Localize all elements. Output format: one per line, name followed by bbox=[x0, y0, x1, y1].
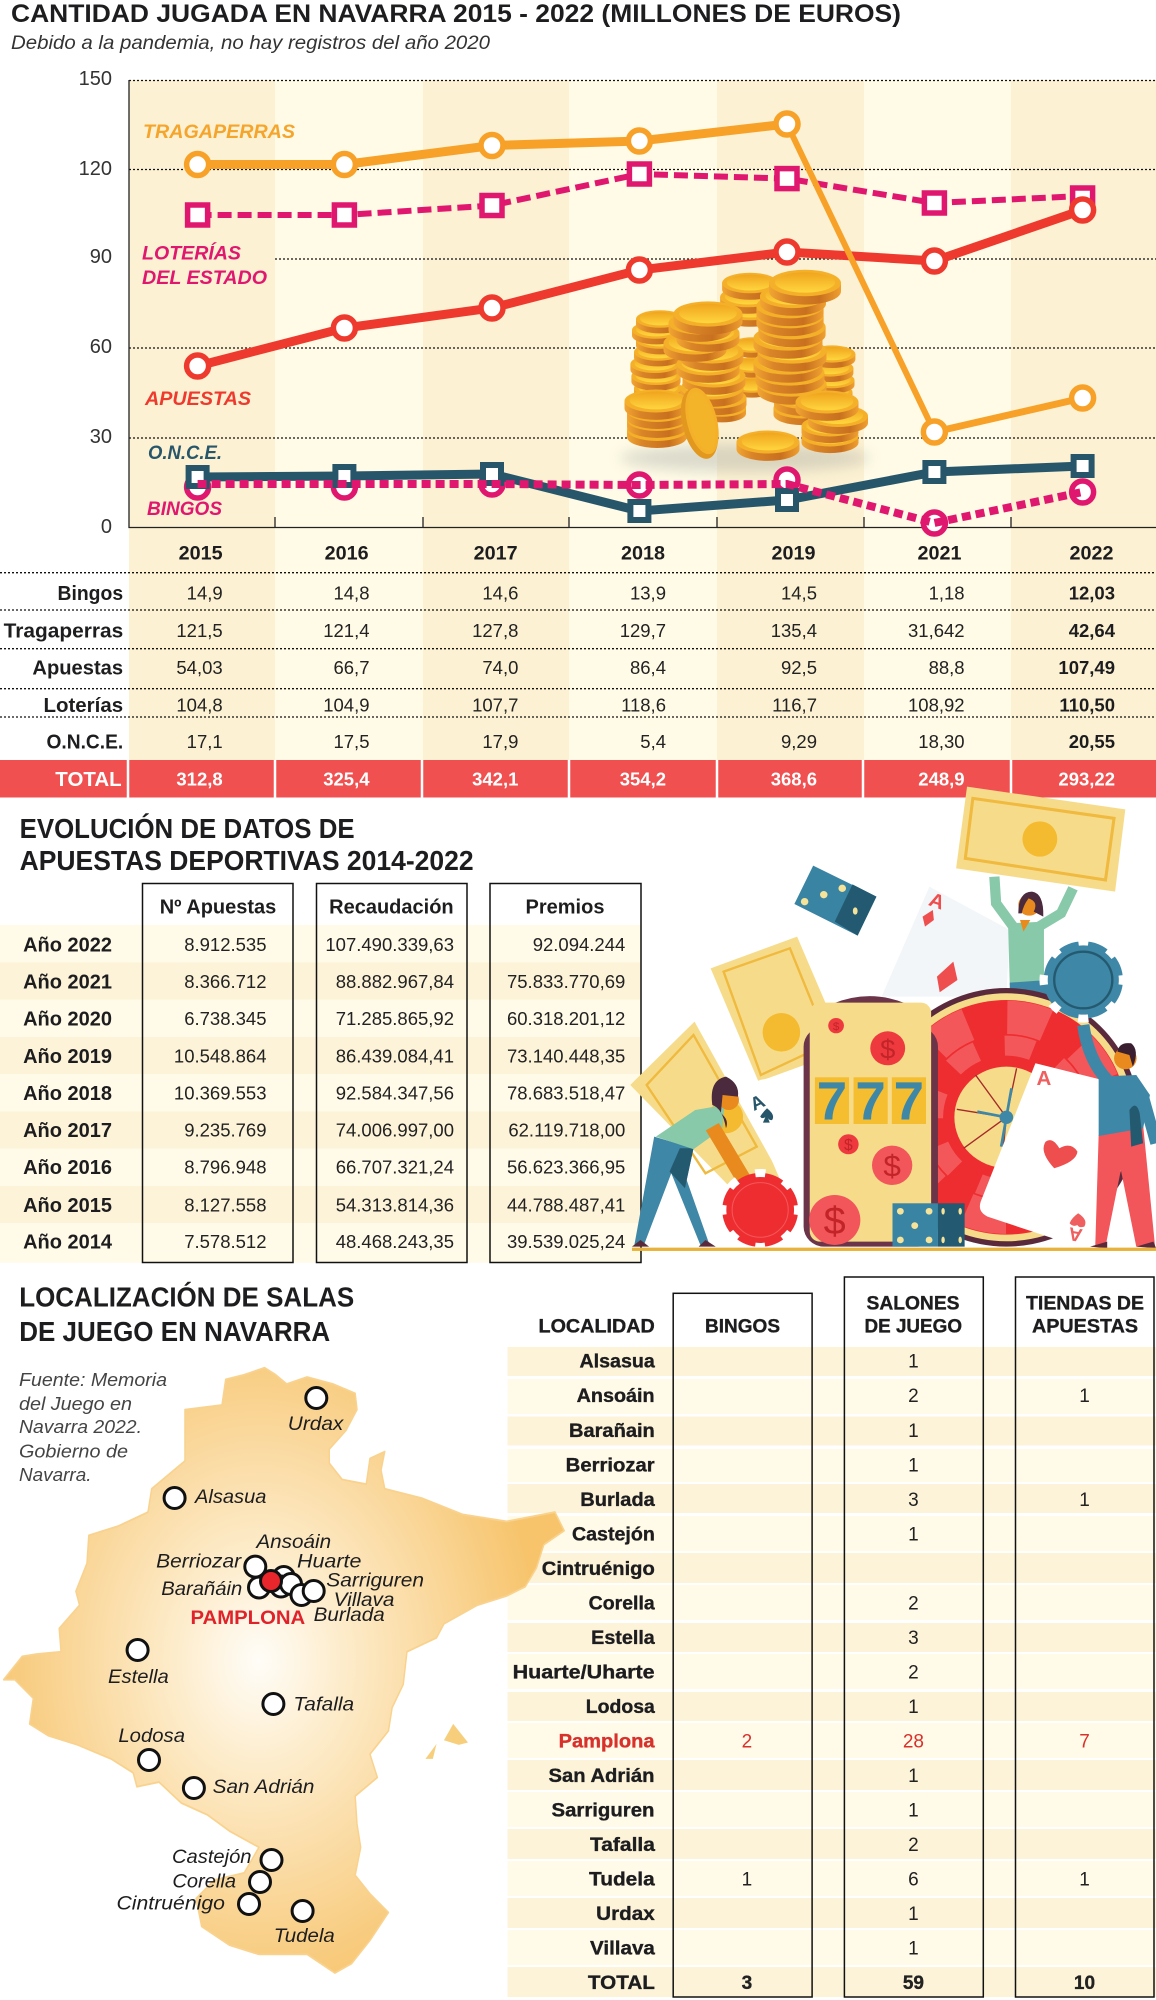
row: ansoáin: Ansoáin bbox=[577, 1386, 655, 1407]
row: total: 354,2 bbox=[620, 768, 666, 790]
row: bingos: Bingos bbox=[58, 583, 123, 605]
row: año 2020: Año 2020 bbox=[23, 1008, 112, 1030]
row: bingos: 14,6 bbox=[482, 582, 518, 604]
row: total: 325,4 bbox=[323, 768, 370, 790]
series: apuestas bbox=[187, 199, 1094, 377]
row: loterías: 118,6 bbox=[621, 694, 666, 716]
row: total: 312,8 bbox=[176, 768, 223, 790]
row: total: 248,9 bbox=[918, 768, 965, 790]
row: total: 342,1 bbox=[472, 768, 518, 790]
location labels: Berriozar bbox=[156, 1552, 242, 1572]
row: año 2019: 73.140.448,35 bbox=[507, 1046, 625, 1066]
table headers: LOCALIDAD bbox=[538, 1316, 655, 1338]
row: apuestas: 54,03 bbox=[176, 657, 223, 678]
row: año 2017: 62.119.718,00 bbox=[508, 1120, 625, 1140]
illustration: casino scene bbox=[630, 787, 1156, 1251]
row: bingos: 14,9 bbox=[187, 582, 223, 604]
row: loterías: Loterías bbox=[44, 695, 123, 717]
label: apuestas: APUESTAS bbox=[144, 389, 251, 410]
row: burlada: 3 bbox=[908, 1490, 919, 1511]
row: urdax bbox=[596, 1904, 919, 1925]
row: o.n.c.e.: 17,9 bbox=[482, 731, 518, 752]
heading: evolución de datos: APUESTAS DEPORTIVAS 2014-2022 bbox=[20, 845, 474, 876]
row: urdax: 1 bbox=[908, 1904, 919, 1925]
row: apuestas: 107,49 bbox=[1058, 657, 1115, 678]
figure: woman holding banknote bbox=[994, 877, 1073, 1000]
row: año 2017: 74.006.997,00 bbox=[336, 1120, 454, 1140]
row: castejón bbox=[572, 1524, 919, 1546]
row: barañain bbox=[569, 1421, 919, 1442]
location labels: Castejón bbox=[172, 1847, 252, 1868]
casino chip: red bbox=[722, 1173, 798, 1247]
location labels: Burlada bbox=[314, 1605, 385, 1626]
row: loterías: 108,92 bbox=[908, 694, 965, 716]
row: total bbox=[588, 1973, 1095, 1994]
row: año 2021: 88.882.967,84 bbox=[336, 971, 454, 992]
source note: Navarra 2022. bbox=[19, 1417, 142, 1437]
slot machine: 7 bbox=[817, 1072, 847, 1131]
row: lodosa bbox=[586, 1697, 919, 1718]
row: villava: 1 bbox=[908, 1938, 919, 1960]
data table: cantidad jugada bbox=[0, 544, 1156, 798]
year headers: 2021 bbox=[918, 544, 962, 564]
location labels: Villava bbox=[334, 1590, 394, 1611]
table headers: BINGOS bbox=[705, 1316, 780, 1338]
column headers: Nº Apuestas bbox=[160, 896, 276, 918]
row: apuestas: 66,7 bbox=[333, 657, 370, 678]
row: apuestas: 74,0 bbox=[482, 657, 518, 678]
row: apuestas: 86,4 bbox=[630, 657, 666, 678]
row: año 2022: 92.094.244 bbox=[533, 934, 625, 955]
playing card: ace of diamonds bbox=[882, 887, 1010, 997]
row: año 2020: 71.285.865,92 bbox=[336, 1008, 454, 1029]
row: bingos: 14,5 bbox=[781, 582, 817, 604]
row: año 2018: 10.369.553 bbox=[174, 1082, 266, 1104]
row: berriozar bbox=[566, 1456, 919, 1476]
row: año 2022: Año 2022 bbox=[23, 934, 112, 956]
slot machine: 7 bbox=[894, 1072, 924, 1131]
series: o.n.c.e. bbox=[189, 457, 1092, 520]
series: tragaperras bbox=[187, 113, 1094, 443]
row: loterías: 104,8 bbox=[176, 694, 223, 716]
row: tragaperras: 135,4 bbox=[771, 620, 817, 641]
row: pamplona: 7 bbox=[1079, 1732, 1090, 1752]
playing card: ace of hearts: A bbox=[1037, 1068, 1052, 1090]
location labels: Sarriguren bbox=[326, 1570, 424, 1592]
row: huarte/uharte: 2 bbox=[908, 1662, 919, 1684]
location labels: Corella bbox=[172, 1872, 236, 1892]
row: año 2015: Año 2015 bbox=[23, 1195, 112, 1217]
location labels: Urdax bbox=[288, 1414, 345, 1435]
row: tafalla: Tafalla bbox=[590, 1835, 655, 1856]
row: apuestas bbox=[32, 657, 1115, 680]
row: alsasua bbox=[580, 1352, 919, 1372]
row: año 2020 bbox=[23, 1008, 625, 1030]
y axis labels: 60 bbox=[90, 336, 112, 358]
row: loterías: 110,50 bbox=[1059, 694, 1115, 716]
year headers: 2015 bbox=[179, 544, 223, 564]
row: estella: Estella bbox=[591, 1628, 655, 1649]
row: o.n.c.e.: 9,29 bbox=[781, 731, 817, 752]
row: año 2017 bbox=[23, 1120, 625, 1142]
row: año 2019: 10.548.864 bbox=[174, 1046, 266, 1066]
row: año 2021: Año 2021 bbox=[23, 972, 112, 994]
location labels: Tafalla bbox=[293, 1694, 354, 1716]
heading: evolución de datos: EVOLUCIÓN DE DATOS DE bbox=[20, 813, 355, 844]
location labels: Alsasua bbox=[194, 1487, 266, 1508]
location labels bbox=[108, 1414, 424, 1947]
column headers: Recaudación bbox=[329, 896, 454, 918]
row: sarriguren bbox=[552, 1800, 919, 1822]
row: huarte/uharte bbox=[513, 1662, 919, 1684]
row: corella bbox=[589, 1594, 919, 1614]
row: año 2021: 75.833.770,69 bbox=[507, 971, 625, 992]
row: apuestas: 92,5 bbox=[781, 657, 817, 678]
row: o.n.c.e.: 20,55 bbox=[1069, 731, 1115, 752]
row: total: TOTAL bbox=[588, 1973, 655, 1994]
row: año 2018: 78.683.518,47 bbox=[507, 1082, 625, 1104]
slot coins: $ bbox=[844, 1137, 853, 1154]
slot coins: $ bbox=[833, 1021, 840, 1033]
figure: man bbox=[1083, 1025, 1156, 1248]
label: loterías del estado: LOTERÍAS bbox=[142, 242, 241, 264]
column headers bbox=[160, 896, 604, 918]
row: año 2014: 48.468.243,35 bbox=[336, 1231, 454, 1252]
row: castejón: Castejón bbox=[572, 1524, 655, 1546]
row: pamplona: Pamplona bbox=[559, 1732, 655, 1752]
row: tudela bbox=[589, 1870, 1090, 1890]
row: año 2014: 7.578.512 bbox=[184, 1231, 266, 1252]
row: o.n.c.e.: 17,5 bbox=[333, 731, 370, 752]
row: tragaperras: 31,642 bbox=[908, 620, 965, 641]
row: corella: Corella bbox=[589, 1594, 655, 1614]
row: berriozar: Berriozar bbox=[566, 1456, 655, 1476]
row: total: 10 bbox=[1074, 1973, 1095, 1994]
row: tragaperras: 129,7 bbox=[620, 620, 666, 641]
source note: Fuente: Memoria bbox=[19, 1370, 167, 1390]
row: loterías: 104,9 bbox=[323, 694, 370, 716]
row: san adrián: San Adrián bbox=[548, 1766, 654, 1787]
row: año 2015: 54.313.814,36 bbox=[336, 1194, 454, 1216]
row: año 2015: 8.127.558 bbox=[184, 1194, 266, 1216]
row: pamplona bbox=[559, 1732, 1090, 1752]
row: huarte/uharte: Huarte/Uharte bbox=[513, 1662, 655, 1684]
line chart bbox=[79, 68, 1156, 538]
row: tudela: 6 bbox=[908, 1870, 919, 1890]
y axis labels: 90 bbox=[90, 246, 112, 268]
row: berriozar: 1 bbox=[908, 1456, 919, 1476]
series: bingos dashed line bbox=[198, 484, 1083, 523]
row: año 2016 bbox=[23, 1156, 625, 1179]
row: urdax: Urdax bbox=[596, 1904, 655, 1925]
row: año 2014 bbox=[23, 1231, 625, 1254]
y axis labels: 150 bbox=[79, 68, 112, 90]
location labels: Barañáin bbox=[161, 1579, 242, 1600]
casino chip: blue bbox=[1044, 941, 1123, 1019]
row: año 2016: Año 2016 bbox=[23, 1157, 112, 1179]
row: burlada: Burlada bbox=[580, 1490, 655, 1511]
row: ansoáin: 1 bbox=[1079, 1386, 1090, 1407]
row: alsasua: 1 bbox=[908, 1352, 919, 1372]
row: total: 368,6 bbox=[771, 768, 817, 790]
banknote: left lower bbox=[630, 1022, 781, 1190]
row: estella bbox=[591, 1628, 919, 1649]
playing card: ace of hearts bbox=[980, 1063, 1109, 1247]
roulette wheel bbox=[874, 988, 1139, 1247]
die: bottom bbox=[892, 1203, 965, 1247]
map shape bbox=[4, 1368, 564, 1973]
row: año 2022 bbox=[23, 934, 625, 956]
table: salas por localidad bbox=[513, 1277, 1154, 1997]
slot coins: $ bbox=[880, 1035, 895, 1064]
table headers: SALONES bbox=[866, 1294, 960, 1314]
row: total: 3 bbox=[742, 1973, 752, 1994]
row: total bbox=[0, 760, 1156, 798]
row: tragaperras: Tragaperras bbox=[4, 620, 123, 642]
row: apuestas: Apuestas bbox=[32, 658, 123, 680]
ground line bbox=[632, 1248, 1156, 1251]
row: burlada bbox=[580, 1490, 1090, 1511]
row: loterías bbox=[44, 694, 1115, 717]
row: año 2014: Año 2014 bbox=[23, 1232, 113, 1254]
y axis labels: 30 bbox=[90, 426, 112, 448]
row: año 2016: 8.796.948 bbox=[184, 1156, 266, 1178]
row: año 2018: Año 2018 bbox=[23, 1083, 112, 1105]
heading: evolución de datos bbox=[20, 813, 474, 876]
column headers: Premios bbox=[526, 896, 604, 918]
row: o.n.c.e.: 17,1 bbox=[187, 731, 223, 752]
row: o.n.c.e. bbox=[46, 731, 1115, 754]
row: san adrián: 1 bbox=[908, 1766, 919, 1787]
row: ansoáin: 2 bbox=[908, 1386, 919, 1407]
series: loterías del estado bbox=[188, 164, 1093, 225]
year headers: 2019 bbox=[772, 544, 816, 564]
row: burlada: 1 bbox=[1079, 1490, 1090, 1511]
playing card: ace of hearts: A bbox=[1066, 1222, 1084, 1245]
row: tragaperras: 121,4 bbox=[323, 620, 370, 641]
row: pamplona: 2 bbox=[742, 1732, 752, 1752]
row: tafalla bbox=[590, 1835, 919, 1856]
playing card: ace of spades bbox=[741, 1070, 811, 1247]
row: año 2014: 39.539.025,24 bbox=[507, 1231, 625, 1252]
row: bingos: 12,03 bbox=[1069, 582, 1115, 604]
playing card: ace of diamonds: A bbox=[926, 889, 948, 915]
map: navarra bbox=[4, 1368, 564, 1973]
title: CANTIDAD JUGADA EN NAVARRA 2015 - 2022 (MILLONES DE EUROS) bbox=[11, 0, 901, 28]
banknote: top bbox=[956, 787, 1125, 892]
row: año 2015 bbox=[23, 1194, 625, 1217]
label: loterías del estado: DEL ESTADO bbox=[142, 268, 267, 289]
y axis labels: 120 bbox=[79, 158, 112, 180]
heading: localización de salas: LOCALIZACIÓN DE SALAS bbox=[19, 1281, 354, 1312]
row: alsasua: Alsasua bbox=[580, 1352, 655, 1372]
label: loterías del estado bbox=[142, 242, 267, 289]
row: total: 293,22 bbox=[1058, 768, 1115, 790]
location labels: Tudela bbox=[274, 1926, 335, 1947]
panel: column bands bbox=[129, 80, 1156, 760]
row: año 2017: Año 2017 bbox=[23, 1120, 112, 1142]
row: san adrián bbox=[548, 1766, 919, 1787]
row: barañain: 1 bbox=[908, 1421, 919, 1442]
row: o.n.c.e.: 5,4 bbox=[640, 731, 666, 752]
row: total: 59 bbox=[903, 1973, 924, 1994]
location labels: Cintruénigo bbox=[116, 1894, 225, 1914]
row: sarriguren: Sarriguren bbox=[552, 1800, 654, 1822]
location labels: Lodosa bbox=[118, 1726, 185, 1747]
row: bingos: 14,8 bbox=[333, 582, 370, 604]
location labels: Huarte bbox=[297, 1552, 361, 1572]
die: floating bbox=[794, 866, 876, 936]
row: loterías: 116,7 bbox=[772, 694, 817, 716]
row: villava: Villava bbox=[590, 1938, 655, 1960]
table: localidades stripes bbox=[508, 1347, 1156, 1997]
banknote: left middle bbox=[711, 937, 846, 1082]
row: bingos: 1,18 bbox=[929, 582, 965, 604]
coins illustration bbox=[620, 270, 870, 472]
table headers: TIENDAS DE bbox=[1026, 1294, 1144, 1314]
slot coins: $ bbox=[824, 1200, 846, 1243]
year headers: 2022 bbox=[1070, 544, 1114, 564]
slot coins: $ bbox=[883, 1149, 901, 1184]
row: tragaperras: 42,64 bbox=[1069, 620, 1116, 641]
row: o.n.c.e.: O.N.C.E. bbox=[46, 732, 123, 754]
playing card: ace of spades: A bbox=[747, 1091, 769, 1116]
slot machine: 7 bbox=[855, 1072, 886, 1131]
year headers: 2016 bbox=[325, 544, 369, 564]
row: villava bbox=[590, 1938, 919, 1960]
row: tafalla: 2 bbox=[908, 1835, 919, 1856]
row: año 2022: 107.490.339,63 bbox=[325, 934, 454, 955]
row: total: TOTAL bbox=[55, 769, 122, 791]
location labels: PAMPLONA bbox=[190, 1608, 305, 1629]
year headers bbox=[179, 544, 1114, 564]
row: año 2021: 8.366.712 bbox=[184, 971, 266, 992]
row: año 2017: 9.235.769 bbox=[184, 1120, 266, 1140]
row: año 2018: 92.584.347,56 bbox=[336, 1082, 454, 1104]
row: castejón: 1 bbox=[908, 1524, 919, 1546]
year headers: 2017 bbox=[474, 544, 518, 564]
location labels: Ansoáin bbox=[255, 1532, 331, 1553]
row: barañain: Barañain bbox=[569, 1421, 655, 1442]
row: apuestas: 88,8 bbox=[929, 657, 965, 678]
row: año 2018 bbox=[23, 1082, 625, 1105]
table headers bbox=[538, 1294, 1144, 1338]
source note: Gobierno de bbox=[19, 1442, 128, 1462]
label: tragaperras: TRAGAPERRAS bbox=[143, 122, 295, 143]
marker: pamplona bbox=[260, 1570, 282, 1592]
series: bingos circles bbox=[187, 469, 1094, 534]
row: año 2019 bbox=[23, 1046, 625, 1068]
location labels: Estella bbox=[108, 1667, 169, 1688]
row: lodosa: Lodosa bbox=[586, 1697, 655, 1718]
heading: localización de salas bbox=[19, 1281, 354, 1347]
year headers: 2018 bbox=[621, 544, 665, 564]
row: o.n.c.e.: 18,30 bbox=[918, 731, 965, 752]
row: corella: 2 bbox=[908, 1594, 919, 1614]
row: año 2016: 66.707.321,24 bbox=[336, 1156, 454, 1178]
figure: woman pushing chip bbox=[632, 1077, 743, 1247]
source note: Navarra. bbox=[19, 1465, 92, 1485]
label: o.n.c.e.: O.N.C.E. bbox=[148, 443, 222, 464]
row: año 2020: 6.738.345 bbox=[184, 1008, 266, 1029]
slot machine bbox=[804, 996, 938, 1247]
table headers: APUESTAS bbox=[1032, 1316, 1138, 1338]
row: bingos bbox=[58, 582, 1115, 605]
row: lodosa: 1 bbox=[908, 1697, 919, 1718]
table headers: DE JUEGO bbox=[864, 1316, 962, 1338]
row: sarriguren: 1 bbox=[908, 1800, 919, 1822]
y axis labels: 0 bbox=[101, 516, 112, 538]
row: tudela: 1 bbox=[1079, 1870, 1090, 1890]
label: bingos: BINGOS bbox=[147, 499, 222, 520]
source note: del Juego en bbox=[19, 1394, 132, 1414]
row: tragaperras: 127,8 bbox=[472, 620, 518, 641]
slot coins bbox=[809, 1018, 912, 1245]
row: pamplona: 28 bbox=[903, 1732, 924, 1752]
row: bingos: 13,9 bbox=[630, 582, 666, 604]
row: tragaperras: 121,5 bbox=[176, 620, 223, 641]
row: año 2020: 60.318.201,12 bbox=[507, 1008, 625, 1029]
row: tudela: Tudela bbox=[589, 1870, 655, 1890]
source note bbox=[19, 1370, 167, 1485]
row: tudela: 1 bbox=[742, 1870, 752, 1890]
subtitle: Debido a la pandemia, no hay registros del año 2020 bbox=[11, 33, 490, 54]
row: tragaperras bbox=[4, 620, 1116, 642]
row: estella: 3 bbox=[908, 1628, 919, 1649]
row: cintruénigo: Cintruénigo bbox=[542, 1559, 655, 1580]
row: año 2019: Año 2019 bbox=[23, 1046, 112, 1068]
y axis labels bbox=[79, 68, 112, 538]
row: ansoáin bbox=[577, 1386, 1090, 1407]
row: año 2015: 44.788.487,41 bbox=[507, 1194, 625, 1216]
heading: localización de salas: DE JUEGO EN NAVARRA bbox=[19, 1316, 330, 1347]
row: año 2021 bbox=[23, 971, 625, 994]
table: apuestas deportivas bbox=[0, 884, 641, 1263]
location labels: San Adrián bbox=[213, 1777, 314, 1798]
row: año 2019: 86.439.084,41 bbox=[336, 1046, 454, 1066]
location markers bbox=[127, 1388, 327, 1922]
row: loterías: 107,7 bbox=[472, 694, 518, 716]
row: año 2022: 8.912.535 bbox=[184, 934, 266, 955]
row: año 2016: 56.623.366,95 bbox=[507, 1156, 625, 1178]
